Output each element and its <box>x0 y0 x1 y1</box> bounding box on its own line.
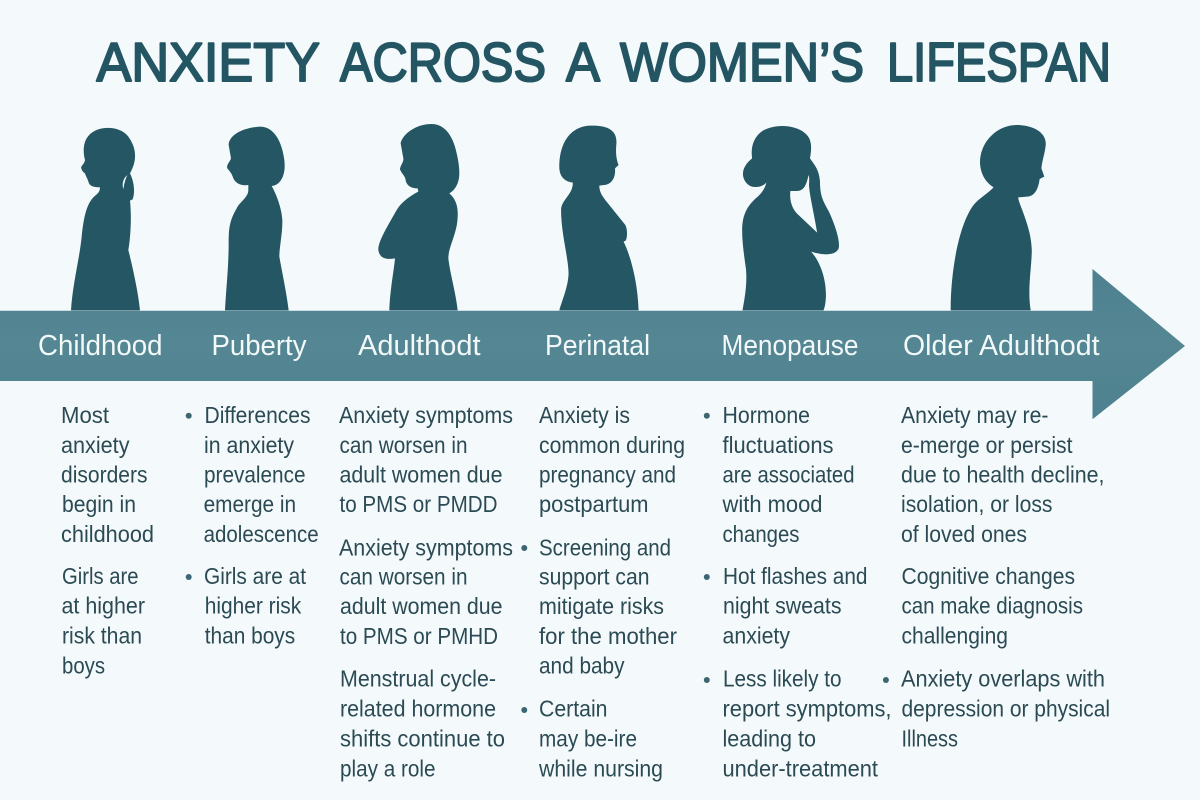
column: perinatal text: Screening and <box>539 535 671 561</box>
column: perinatal text: Anxiety is <box>539 402 630 428</box>
column: puberty text: Differences <box>204 402 310 428</box>
column: puberty text: than boys <box>205 622 295 648</box>
column: childhood text: boys <box>62 652 105 678</box>
column: adulthood text: can worsen in <box>340 432 468 458</box>
stage labels on the arrow <box>38 330 1100 362</box>
silhouette: older adulthood <box>951 125 1046 310</box>
column: adulthood text: play a role <box>340 756 436 782</box>
silhouette: menopause with hand to head <box>742 126 839 310</box>
column: puberty text: in anxiety <box>204 432 294 458</box>
column: perinatal text: and baby <box>539 652 625 678</box>
column: older adulthood text: due to health decline, <box>901 462 1104 488</box>
column: older adulthood text: e-merge or persist <box>901 432 1073 458</box>
silhouette: adulthood with crossed arms <box>378 124 459 310</box>
column: perinatal text: postpartum <box>539 491 648 517</box>
column: perinatal text: for the mother <box>539 623 677 649</box>
column: perinatal text <box>521 402 685 782</box>
column: childhood text: disorders <box>61 462 148 488</box>
column: puberty text: adolescence <box>204 521 319 547</box>
silhouette: childhood girl with ponytail <box>71 128 140 310</box>
column: menopause text: are associated <box>722 462 854 488</box>
column: menopause text: anxiety <box>722 622 790 648</box>
column: older adulthood text: Illness <box>902 726 958 752</box>
stage labels on the arrow: Menopause <box>722 330 858 362</box>
title <box>96 31 1111 93</box>
column: adulthood text: can worsen in <box>340 564 468 590</box>
stage labels on the arrow: Childhood <box>38 330 162 362</box>
column: puberty text: prevalence <box>204 462 306 488</box>
column: menopause text: Hormone <box>722 402 810 428</box>
column: childhood text <box>61 402 154 678</box>
stage labels on the arrow: Older Adulthodt <box>903 330 1100 362</box>
column: older adulthood text <box>883 402 1110 752</box>
column: menopause text: report symptoms, <box>722 696 892 722</box>
column: menopause text: Hot flashes and <box>723 563 868 589</box>
stage labels on the arrow: Adulthodt <box>358 330 480 362</box>
column: older adulthood text: challenging <box>902 622 1008 648</box>
column: menopause text <box>704 402 892 782</box>
column: puberty text: emerge in <box>204 491 296 517</box>
column: childhood text: Most <box>61 402 110 428</box>
column: adulthood text: adult women due <box>340 462 502 488</box>
title: A <box>566 31 600 93</box>
column: menopause text: night sweats <box>723 593 842 619</box>
column: older adulthood text: isolation, or loss <box>901 491 1052 517</box>
title: LIFESPAN <box>887 31 1111 93</box>
column: perinatal text: Certain <box>539 696 608 722</box>
silhouette: puberty <box>225 127 289 310</box>
column: adulthood text: Anxiety symptoms <box>339 535 513 561</box>
column: adulthood text <box>339 402 513 782</box>
column: childhood text: childhood <box>61 521 154 547</box>
column: adulthood text: to PMS or PMDD <box>340 491 498 517</box>
column: menopause text: fluctuations <box>722 432 834 458</box>
stage labels on the arrow: Puberty <box>212 330 307 362</box>
column: menopause text: Less likely to <box>723 666 842 692</box>
column: perinatal text: while nursing <box>538 756 663 782</box>
column: older adulthood text: Cognitive changes <box>902 563 1075 589</box>
column: adulthood text: to PMS or PMHD <box>340 623 498 649</box>
column: adulthood text: Anxiety symptoms <box>339 402 513 428</box>
title: ACROSS <box>340 31 546 93</box>
column: childhood text: anxiety <box>61 432 130 458</box>
title: WOMEN’S <box>620 31 864 93</box>
column: perinatal text: may be-ire <box>539 726 637 752</box>
column: childhood text: Girls are <box>62 563 138 589</box>
column: menopause text: changes <box>722 521 800 547</box>
column: older adulthood text: can make diagnosis <box>902 593 1083 619</box>
column: puberty text: higher risk <box>205 593 302 619</box>
column: adulthood text: adult women due <box>340 593 502 619</box>
column: older adulthood text: Anxiety overlaps with <box>901 666 1105 692</box>
column: adulthood text: related hormone <box>340 696 496 722</box>
column: puberty text: Girls are at <box>204 563 307 589</box>
column: older adulthood text: of loved ones <box>901 521 1027 547</box>
column: puberty text <box>186 402 319 648</box>
title: ANXIETY <box>96 31 320 93</box>
column: older adulthood text: Anxiety may re- <box>901 402 1048 428</box>
arrow: timeline banner <box>0 269 1185 419</box>
column: older adulthood text: depression or physical <box>902 696 1110 722</box>
stage labels on the arrow: Perinatal <box>545 330 650 362</box>
column: childhood text: begin in <box>62 491 136 517</box>
column: menopause text: leading to <box>722 726 816 752</box>
column: adulthood text: shifts continue to <box>340 726 505 752</box>
column: perinatal text: pregnancy and <box>539 462 676 488</box>
column: childhood text: risk than <box>62 622 142 648</box>
column: childhood text: at higher <box>62 593 145 619</box>
silhouette: perinatal <box>559 126 639 310</box>
column: menopause text: with mood <box>722 491 822 517</box>
column: perinatal text: mitigate risks <box>539 593 664 619</box>
column: perinatal text: common during <box>539 432 685 458</box>
column: menopause text: under-treatment <box>722 756 879 782</box>
column: adulthood text: Menstrual cycle- <box>340 666 496 692</box>
column: perinatal text: support can <box>539 564 650 590</box>
